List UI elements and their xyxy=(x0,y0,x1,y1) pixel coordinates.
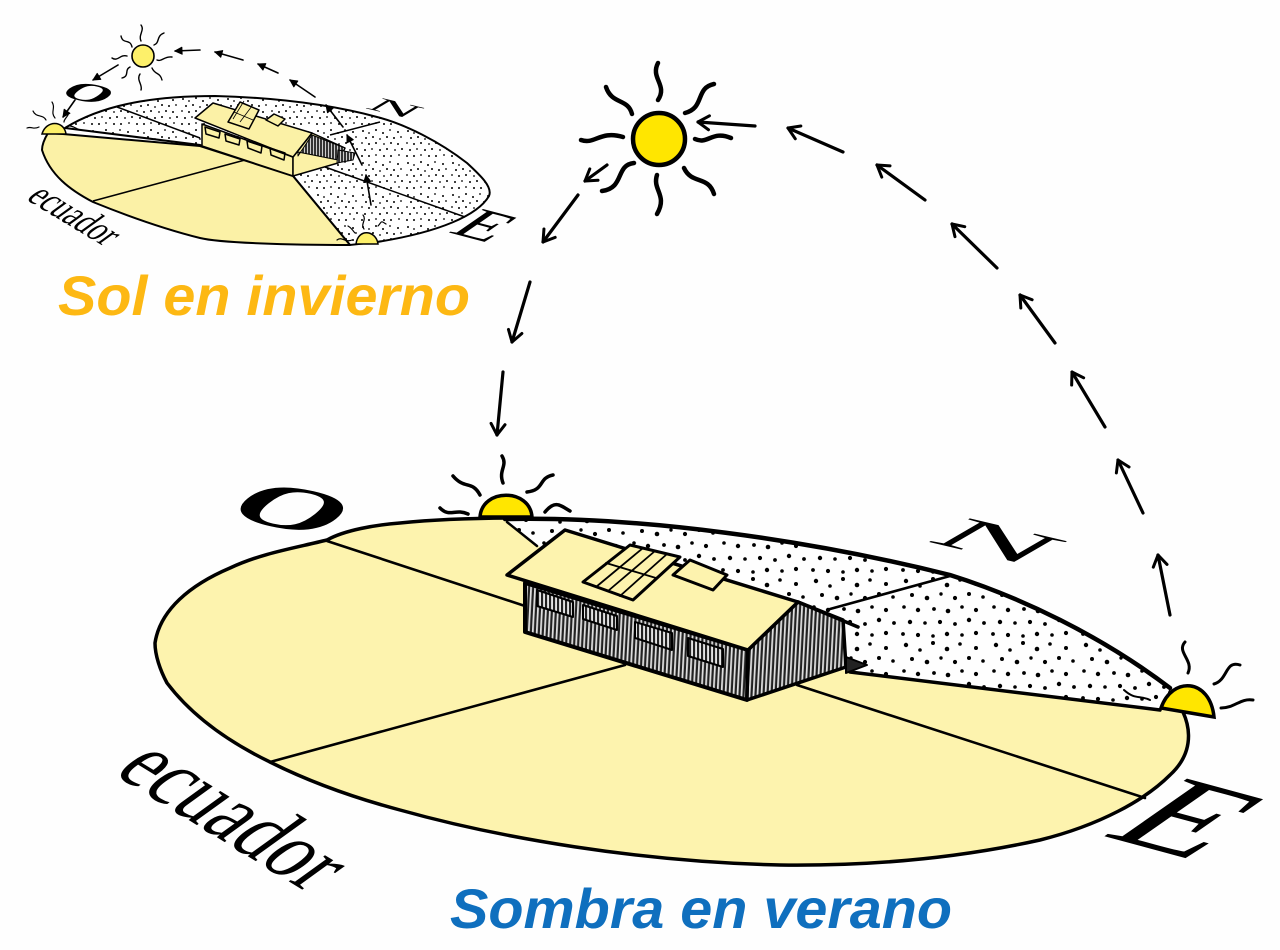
panel: winter sun diagram xyxy=(17,25,534,252)
icon: summer high sun xyxy=(581,63,731,214)
heading: Sol en invierno: Sol en invierno xyxy=(58,264,470,327)
shade edges xyxy=(505,519,1170,710)
house windows xyxy=(537,590,723,667)
solar panel xyxy=(583,545,680,600)
arrows: summer sun path xyxy=(497,122,1170,615)
label: E small: E xyxy=(435,200,534,251)
label: ecuador: ecuador xyxy=(95,722,379,906)
icon: west half sun xyxy=(440,456,570,517)
house front wall xyxy=(525,583,748,700)
vent xyxy=(846,657,867,673)
icon: small high sun xyxy=(112,25,172,90)
heading: Sombra en verano: Sombra en verano xyxy=(450,877,952,940)
compass lines xyxy=(270,541,1145,798)
icon: small south sun xyxy=(337,215,386,244)
panel: summer shade diagram xyxy=(95,456,1280,906)
icon: east half sun xyxy=(1124,642,1253,717)
skylight xyxy=(673,560,727,590)
icon: small house xyxy=(195,101,355,176)
shaded area: summer shade zone xyxy=(505,519,1170,709)
compass lines xyxy=(93,107,465,217)
ground disc: winter shade zone xyxy=(65,96,490,245)
label: O: O xyxy=(205,468,378,549)
label: ecuador small: ecuador xyxy=(17,177,134,252)
label: O small: O xyxy=(50,76,127,110)
arrows: small sun path xyxy=(63,50,371,205)
icon: small west sun xyxy=(27,102,80,134)
icon: house with solar panels xyxy=(507,530,867,700)
house side wall xyxy=(747,602,846,700)
ground disc: winter sunlit zone xyxy=(42,133,350,245)
label: N small: N xyxy=(358,94,432,122)
label: N: N xyxy=(911,509,1084,574)
ground disc: sunlit area xyxy=(155,518,1189,865)
house roof xyxy=(507,530,798,650)
